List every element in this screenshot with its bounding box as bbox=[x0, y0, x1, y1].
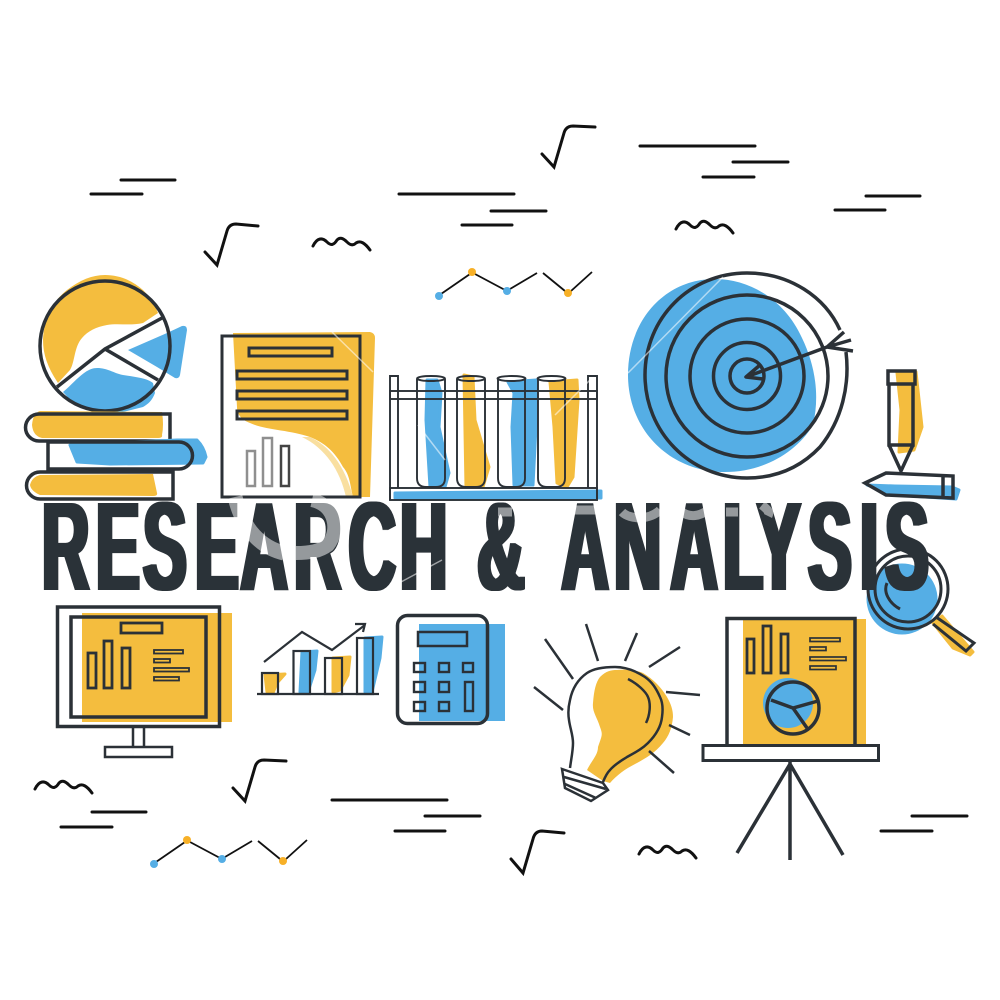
icon: root mark 4 bbox=[511, 831, 564, 873]
decorative dashes: bottom right bbox=[881, 816, 967, 831]
icon: stack of books bbox=[26, 411, 206, 499]
zigzag line with dots, bottom bbox=[150, 836, 307, 868]
icon: calculator bbox=[398, 616, 505, 724]
squiggle 3 bbox=[35, 781, 92, 793]
decorative dashes: bottom centre bbox=[332, 800, 480, 831]
icon: root mark 1 bbox=[205, 224, 258, 265]
squiggle 2 bbox=[676, 221, 733, 233]
decorative dashes: top centre bbox=[399, 194, 546, 225]
icon: growth bar chart bbox=[257, 624, 382, 694]
squiggle 4 bbox=[639, 846, 696, 858]
icon: root mark 3 bbox=[233, 760, 286, 801]
squiggle 1 bbox=[313, 238, 370, 250]
icon: monitor with dashboard bbox=[58, 607, 232, 757]
icon: vertical pencil bbox=[888, 371, 922, 471]
watermark overlay on title and icons bbox=[235, 277, 769, 590]
icon: horizontal pencil bbox=[865, 473, 959, 499]
icon: pie chart on books bbox=[40, 275, 187, 412]
icon: target with arrow bbox=[628, 273, 853, 478]
icon: test tubes in rack bbox=[390, 375, 601, 500]
decorative dashes: bottom left bbox=[61, 812, 146, 827]
icon: magnifying glass bbox=[866, 549, 974, 655]
icon: light bulb bbox=[534, 624, 700, 801]
icon: root mark 2 bbox=[542, 126, 595, 167]
title: RESEARCH & ANALYSIS bbox=[42, 477, 929, 618]
icon: document with chart bbox=[222, 332, 375, 497]
icon: presentation easel bbox=[703, 618, 878, 860]
decorative dashes: top right bbox=[835, 196, 920, 210]
decorative dashes: top centre right bbox=[640, 146, 788, 177]
zigzag line with dots, top bbox=[435, 268, 592, 300]
decorative dashes: top left bbox=[91, 180, 175, 194]
